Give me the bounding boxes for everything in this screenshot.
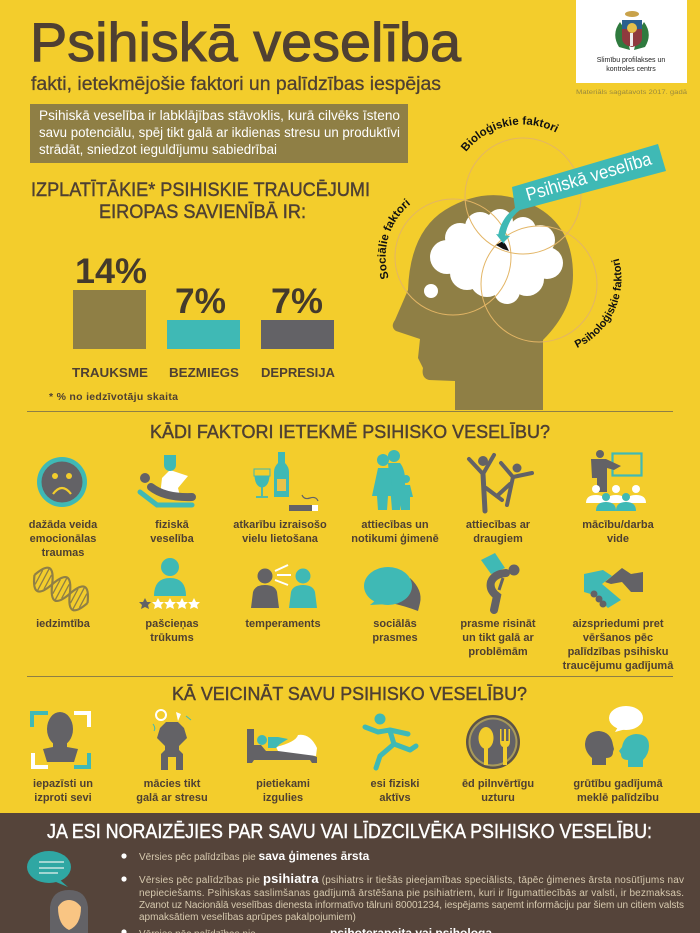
factor: family: attiecības un xyxy=(361,519,429,531)
tip: sleep enough xyxy=(247,729,317,804)
bar: bezmiegs: 7% xyxy=(175,282,226,321)
factor: problem solving xyxy=(460,553,536,658)
tip: handle stress xyxy=(136,710,208,804)
bar: depresija xyxy=(261,282,336,380)
factor: study and work environment: mācību/darba xyxy=(582,519,655,531)
definition box: Psihiskā veselība ir labklājības stāvoklis, kurā cilvēks īsteno xyxy=(39,108,400,123)
bullet list: Zvanot uz Nacionālā veselības dienesta informatīvo tālruni 80001234, iespējams saņemt informāciju par šiem un citiem valsts xyxy=(139,900,684,911)
factor: emotional traumas: traumas xyxy=(42,547,84,559)
tip: eat well: ēd pilnvērtīgu xyxy=(462,778,534,790)
bar chart xyxy=(72,252,336,380)
logo panel xyxy=(576,0,687,83)
factor: substance use: vielu lietošana xyxy=(242,533,319,545)
factor: social skills: prasmes xyxy=(372,632,418,644)
factor: prejudice: palīdzības psihisku xyxy=(568,646,668,658)
bar: trauksme: 14% xyxy=(75,252,147,291)
icon: sad face xyxy=(37,457,87,507)
factor: prejudice: aizspriedumi pret xyxy=(572,618,664,630)
bar: trauksme xyxy=(72,252,148,380)
icon: family xyxy=(372,450,413,510)
logo text: kontroles centrs xyxy=(606,66,656,73)
factor: social skills: sociālās xyxy=(373,618,417,630)
tip: know yourself: iepazīsti un xyxy=(33,778,93,790)
banner xyxy=(496,144,666,244)
date note: Materiāls sagatavots 2017. gadā xyxy=(576,89,687,96)
icon: person carrying a load xyxy=(481,553,520,610)
tip: eat well xyxy=(462,715,534,804)
heading: factors: KĀDI FAKTORI IETEKMĒ PSIHISKO VESELĪBU? xyxy=(150,421,550,442)
tip: be active xyxy=(365,714,419,804)
logo text: Slimību profilakses un xyxy=(597,57,665,64)
factor: family: notikumi ģimenē xyxy=(351,532,439,545)
tip: seek help xyxy=(573,706,663,804)
tip: sleep enough: izgulies xyxy=(263,792,303,804)
tip: know yourself xyxy=(32,712,93,804)
bar: bezmiegs: BEZMIEGS xyxy=(169,365,239,380)
heading: how to promote: KĀ VEICINĀT SAVU PSIHISKO VESELĪBU? xyxy=(172,683,527,704)
factor: physical health: veselība xyxy=(150,533,195,545)
bar: bezmiegs xyxy=(167,282,240,380)
tip: sleep enough: pietiekami xyxy=(256,778,310,790)
tip: seek help: grūtību gadījumā xyxy=(573,778,663,790)
bar: depresija: 7% xyxy=(271,282,323,321)
bar: trauksme: TRAUKSME xyxy=(72,365,148,380)
heading: most common disorders: IZPLATĪTĀKIE* PSIHISKIE TRAUCĒJUMI xyxy=(31,178,370,201)
tip: be active: esi fiziski xyxy=(371,778,419,790)
bar: depresija: DEPRESIJA xyxy=(261,365,336,380)
icon: wine bottle and cigarette xyxy=(254,452,318,511)
bullet list xyxy=(121,849,687,933)
factor: physical health: fiziskā xyxy=(155,519,190,531)
tip: know yourself: izproti sevi xyxy=(34,792,92,804)
icon: dancing friends xyxy=(469,455,532,511)
brain xyxy=(424,209,563,304)
factor: heredity xyxy=(28,563,94,630)
head silhouette xyxy=(393,195,573,410)
icon: teacher and audience xyxy=(586,450,646,511)
icon: person with stars xyxy=(139,558,200,609)
footnote: * % no iedzīvotāju skaita xyxy=(49,391,178,403)
tip: handle stress: galā ar stresu xyxy=(136,792,208,804)
factor: temperament: temperaments xyxy=(245,618,321,630)
factor: prejudice: traucējumu gadījumā xyxy=(563,660,674,672)
icon: woman with speech bubble xyxy=(27,851,88,933)
factor: substance use: atkarību izraisošo xyxy=(233,519,327,531)
bullet list: nepieciešams. Psihiskas saslimšanas gadījumā ārstēšana pie psihiatriem, kuri ir līgumattiecībās ar valsti, ir bezmaksas. xyxy=(139,888,684,899)
icon: speech bubbles xyxy=(364,567,421,611)
icon: coat of arms xyxy=(615,11,649,50)
factor: lack of self-esteem xyxy=(139,558,200,644)
icon: dna xyxy=(28,563,94,615)
factor: problem solving: un tikt galā ar xyxy=(462,632,534,644)
factor: social skills xyxy=(364,567,421,644)
factor: temperament xyxy=(245,565,321,630)
icon: handshake xyxy=(584,568,643,608)
factor: emotional traumas xyxy=(29,457,98,559)
head diagram: Sociālie faktori xyxy=(377,198,410,279)
bullet list: apmaksātiem veselības aprūpes pakalpojumiem) xyxy=(139,912,356,923)
factor: emotional traumas: dažāda veida xyxy=(29,519,98,531)
factor: study and work environment: vide xyxy=(607,533,629,545)
definition box xyxy=(30,104,408,163)
factor: physical health xyxy=(140,455,195,545)
tip: eat well: uzturu xyxy=(481,792,515,804)
factor: family xyxy=(351,450,439,545)
factor: heredity: iedzimtība xyxy=(36,618,91,630)
factor: problem solving: prasme risināt xyxy=(460,618,536,630)
subtitle: fakti, ietekmējošie faktori un palīdzības iespējas xyxy=(31,73,441,95)
heading: most common disorders xyxy=(31,178,370,223)
icon: two people talking xyxy=(251,565,317,608)
factor: study and work environment xyxy=(582,450,655,545)
banner: Psihiskā veselība xyxy=(523,148,654,205)
factor: friends xyxy=(466,455,532,545)
bullet list: Vērsies pēc palīdzības pie psihiatra (psihiatrs ir tiešās pieejamības speciālists, tāpēc ģimenes ārsta nosūtījums nav xyxy=(139,871,684,886)
factor: lack of self-esteem: trūkums xyxy=(150,632,194,644)
factor: friends: attiecības ar xyxy=(466,519,531,531)
definition box: savu potenciālu, spēj tikt galā ar ikdienas stresu un produktīvi xyxy=(39,125,400,140)
icon: portrait in frame xyxy=(32,712,89,767)
icon: person in bed xyxy=(247,729,317,763)
factor: friends: draugiem xyxy=(473,533,523,545)
brain centre mark xyxy=(496,241,509,251)
definition box: strādāt, sniedzot ieguldījumu sabiedrībai xyxy=(39,142,277,157)
factor: lack of self-esteem: pašcieņas xyxy=(145,618,199,630)
icon: stressed person xyxy=(153,710,191,770)
bullet list: Vērsies pēc palīdzības pie sava ģimenes ārsta xyxy=(139,849,370,863)
panel: contact advice xyxy=(0,813,700,933)
factor: emotional traumas: emocionālas xyxy=(30,533,96,545)
factor: prejudice: vēršanos pēc xyxy=(583,632,653,644)
title: Psihiskā veselība xyxy=(30,11,461,73)
icon: runner xyxy=(365,714,416,768)
tip: handle stress: mācies tikt xyxy=(144,778,201,790)
icon: doctor and patient xyxy=(140,455,192,505)
head diagram xyxy=(377,116,666,410)
factor: prejudice xyxy=(563,568,674,672)
factor: problem solving: problēmām xyxy=(468,646,528,658)
head diagram: Psiholoģiskie faktori xyxy=(574,258,622,348)
factor: substance use xyxy=(233,452,327,545)
tip: seek help: meklē palīdzību xyxy=(577,792,659,804)
icon: two heads and bubble xyxy=(585,706,649,767)
tip: be active: aktīvs xyxy=(379,792,411,804)
icon: plate with cutlery xyxy=(466,715,520,769)
head diagram: Bioloģiskie faktori xyxy=(460,116,560,152)
heading: most common disorders: EIROPAS SAVIENĪBĀ IR: xyxy=(99,200,306,223)
factor circles xyxy=(395,138,597,342)
